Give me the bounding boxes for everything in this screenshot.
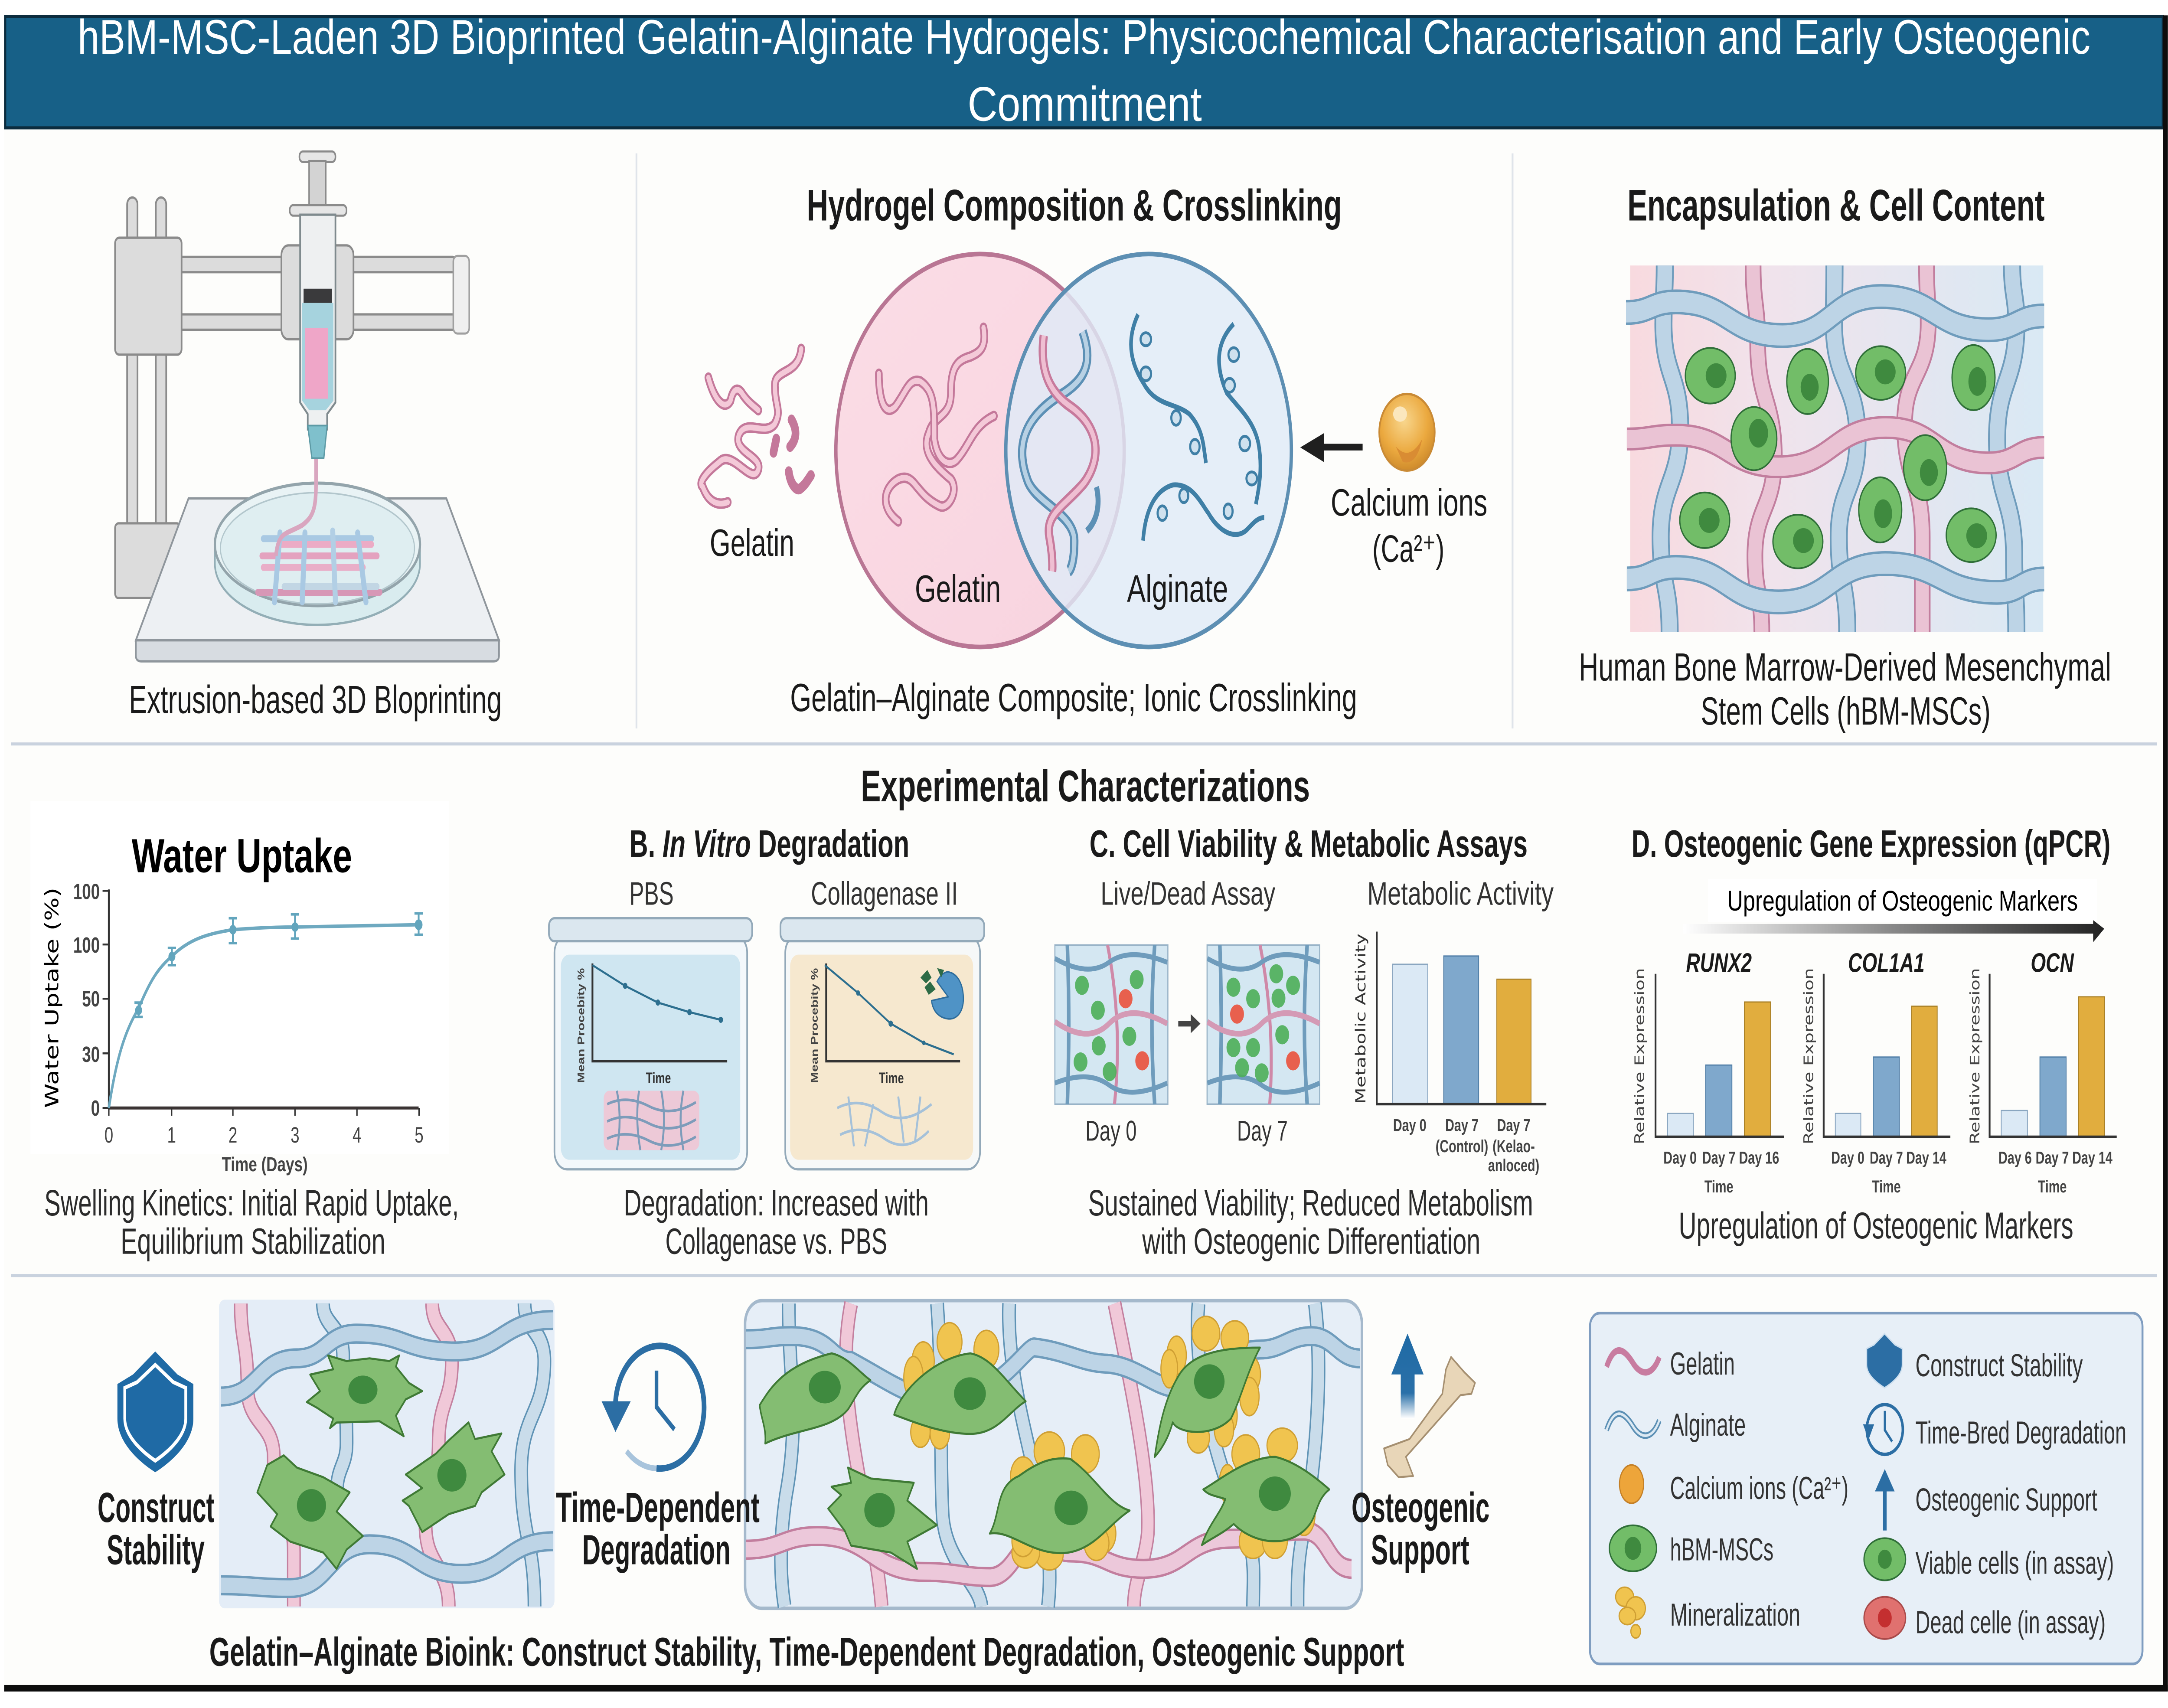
chart: water uptake curve	[41, 880, 424, 1176]
icon: gelatin chains	[879, 328, 994, 521]
image: early cell network	[219, 1300, 555, 1608]
caption: degradation line 1: Degradation: Increased with	[624, 1182, 929, 1223]
arrow: osteogenic upregulation	[1391, 1334, 1424, 1418]
chart: metabolic activity bars: anloced)	[1488, 1156, 1539, 1175]
chart: metabolic activity bars	[1353, 932, 1546, 1175]
label: day 0: Day 0	[1085, 1115, 1136, 1147]
title banner: Commitment	[967, 77, 1202, 131]
arrow: calcium to alginate	[1300, 433, 1363, 462]
icon: petri dish with printed lattice	[215, 458, 420, 625]
icon: construct stability shield	[118, 1352, 193, 1472]
label: collagenase II: Collagenase II	[811, 875, 958, 912]
chart: water uptake curve: 100	[73, 880, 100, 904]
panel: hydrogel composition	[701, 181, 1487, 720]
jar: PBS	[549, 918, 752, 1169]
venn: alginate circle	[1006, 254, 1291, 647]
caption: upregulation: Upregulation of Osteogenic Markers	[1678, 1205, 2073, 1246]
label: metabolic activity: Metabolic Activity	[1367, 875, 1554, 912]
chart: water uptake curve: 3	[291, 1123, 300, 1147]
panel: bioink outcomes	[98, 1300, 1489, 1675]
legend: dead cells: Dead celle (in assay)	[1916, 1605, 2106, 1640]
legend: viable cells: Viable cells (in assay)	[1916, 1545, 2114, 1581]
legend: osteogenic support	[1875, 1469, 2097, 1531]
heading: degradation: B. In Vitro Degradation	[629, 823, 909, 865]
jar: collagenase II: Time	[879, 1069, 904, 1087]
chart: RUNX2: RUNX2	[1686, 948, 1752, 978]
chart: water uptake curve: 0	[91, 1096, 100, 1120]
label: gelatin: Gelatin	[915, 568, 1001, 611]
chart: water uptake curve: 2	[229, 1123, 237, 1147]
heading: experimental characterizations: Experimental Characterizations	[861, 761, 1310, 811]
legend: alginate	[1606, 1408, 1746, 1443]
legend: time-bred degradation: Time-Bred Degradation	[1916, 1415, 2126, 1450]
chart: water uptake curve: 30	[82, 1042, 100, 1067]
chart: water uptake curve: 5	[415, 1123, 424, 1147]
label: osteogenic support: Support	[1371, 1526, 1469, 1573]
label: construct stability: Construct	[98, 1484, 215, 1531]
icon: calcium ion	[1379, 394, 1435, 470]
legend: time-bred degradation	[1863, 1404, 2126, 1454]
chart: RUNX2: Time	[1704, 1177, 1733, 1196]
chart: OCN: Day 14	[2072, 1149, 2112, 1168]
label: time-dependent degradation	[556, 1484, 760, 1573]
jar: collagenase II: Mean Procebity %	[809, 968, 820, 1083]
legend: gelatin	[1606, 1346, 1735, 1381]
chart: COL1A1	[1801, 948, 1950, 1196]
label: calcium formula: (Ca²⁺)	[1372, 527, 1444, 570]
chart: COL1A1: Day 7	[1870, 1149, 1903, 1168]
chart: OCN: Relative Expression	[1967, 968, 1983, 1144]
chart: water uptake curve: 0	[104, 1123, 113, 1147]
heading: viability: C. Cell Viability & Metabolic Assays	[1090, 823, 1528, 865]
chart: cell-laden network	[1626, 265, 2044, 632]
label: PBS: PBS	[629, 875, 674, 912]
jar: PBS: Time	[646, 1069, 671, 1087]
cells	[760, 1348, 1329, 1569]
caption: composite: Gelatin–Alginate Composite; Ionic Crosslinking	[790, 676, 1357, 720]
label: upregulation box	[1708, 879, 2097, 922]
icon: build plate	[136, 498, 499, 661]
label: osteogenic support: Osteogenic	[1352, 1484, 1489, 1531]
chart: water uptake curve: Time (Days)	[222, 1153, 308, 1176]
heading: encapsulation: Encapsulation & Cell Content	[1627, 181, 2044, 230]
chart: water uptake curve: 4	[353, 1123, 361, 1147]
chart: metabolic activity bars: Day 0	[1393, 1116, 1427, 1135]
legend: gelatin: Gelatin	[1670, 1346, 1735, 1381]
chart: COL1A1: COL1A1	[1848, 948, 1925, 978]
chart: RUNX2	[1632, 948, 1784, 1196]
label: alginate: Alginate	[1127, 568, 1228, 611]
chart: RUNX2: Day 0	[1663, 1149, 1697, 1168]
icon: collagenase enzyme	[921, 968, 963, 1019]
chart: OCN: Day 7	[2036, 1149, 2069, 1168]
legend: dead cells	[1864, 1597, 2106, 1640]
panel: encapsulation	[1579, 181, 2111, 733]
icon: alginate chains	[1131, 314, 1264, 541]
icon: free gelatin strands	[701, 349, 811, 503]
panel: cell viability and metabolic assays	[1055, 823, 1554, 1262]
label: gelatin strands: Gelatin	[710, 522, 794, 565]
chart: water uptake curve: Water Uptake (%)	[41, 888, 63, 1108]
icon: time-dependent clock	[601, 1346, 704, 1469]
caption: hBM-MSCs line 2: Stem Cells (hBM-MSCs)	[1701, 689, 1991, 733]
panel: legend	[1590, 1313, 2142, 1664]
chart: OCN	[1967, 948, 2117, 1196]
legend: hBM-MSCs	[1610, 1525, 1773, 1571]
chart: water uptake curve: 1	[167, 1123, 176, 1147]
caption: hBM-MSCs line 1: Human Bone Marrow-Derived Mesenchymal	[1579, 645, 2111, 689]
caption: swelling line 1: Swelling Kinetics: Initial Rapid Uptake,	[44, 1182, 459, 1223]
image: day 7 live dead mesh	[1207, 945, 1319, 1104]
chart: RUNX2: Relative Expression	[1632, 968, 1647, 1144]
label: construct stability: Stability	[107, 1526, 205, 1573]
heading: gene expression: D. Osteogenic Gene Expression (qPCR)	[1632, 823, 2110, 865]
caption: viability line 2: with Osteogenic Differentiation	[1142, 1221, 1480, 1262]
chart: metabolic activity bars: Day 7	[1445, 1116, 1479, 1135]
chart: OCN: Day 6	[1998, 1149, 2032, 1168]
legend: hBM-MSCs: hBM-MSCs	[1670, 1532, 1773, 1568]
chart: water uptake curve: 50	[82, 987, 100, 1011]
legend: construct stability	[1867, 1334, 2083, 1388]
icon: bone	[1384, 1357, 1475, 1477]
legend: viable cells	[1864, 1538, 2114, 1581]
legend: osteogenic support: Osteogenic Support	[1916, 1482, 2097, 1518]
legend: calcium ions	[1619, 1465, 1848, 1506]
caption: swelling line 2: Equilibrium Stabilization	[121, 1221, 385, 1262]
chart: COL1A1: Time	[1872, 1177, 1901, 1196]
caption: extrusion: Extrusion-based 3D Bloprinting	[129, 677, 502, 722]
caption: bioink summary: Gelatin–Alginate Bioink: Construct Stability, Time-Dependent Degradation, Osteogenic Support	[209, 1630, 1404, 1675]
icon: double helix	[1022, 332, 1098, 571]
legend: mineralization: Mineralization	[1670, 1597, 1800, 1633]
label: upregulation box: Upregulation of Osteogenic Markers	[1727, 885, 2078, 917]
chart: metabolic activity bars: (Kelao-	[1492, 1137, 1535, 1156]
jar: PBS: Mean Procebity %	[576, 968, 586, 1083]
chart: COL1A1: Day 14	[1906, 1149, 1946, 1168]
chart: metabolic activity bars: Day 7	[1497, 1116, 1530, 1135]
chart: OCN: OCN	[2031, 948, 2074, 978]
legend: mineralization	[1616, 1587, 1800, 1638]
label: day 7: Day 7	[1237, 1115, 1288, 1147]
label: time-dependent degradation: Time-Dependent	[556, 1484, 760, 1531]
caption: viability line 1: Sustained Viability; Reduced Metabolism	[1088, 1182, 1533, 1223]
chart: OCN: Time	[2038, 1177, 2067, 1196]
legend: alginate: Alginate	[1670, 1408, 1746, 1443]
legend: construct stability: Construct Stability	[1916, 1348, 2083, 1383]
chart: RUNX2: Day 16	[1739, 1149, 1779, 1168]
arrow: day 0 to day 7	[1178, 1014, 1201, 1033]
label: construct stability	[98, 1484, 215, 1573]
label: calcium ions: Calcium ions	[1331, 481, 1487, 524]
caption: degradation line 2: Collagenase vs. PBS	[666, 1221, 887, 1262]
icon: printer frame	[115, 197, 469, 598]
mineral deposits	[904, 1316, 1315, 1570]
panel: extrusion bioprinter	[115, 151, 502, 722]
panel: in vitro degradation	[549, 823, 984, 1262]
icon: syringe	[290, 151, 346, 458]
panel: osteogenic gene expression	[1632, 823, 2117, 1246]
heading: hydrogel: Hydrogel Composition & Crosslinking	[807, 181, 1342, 230]
jar: collagenase II	[780, 918, 984, 1169]
title banner	[5, 10, 2163, 131]
chart: metabolic activity bars: Metabolic Activity	[1353, 934, 1369, 1104]
chart: metabolic activity bars: (Control)	[1436, 1137, 1488, 1156]
label: osteogenic support	[1352, 1484, 1489, 1573]
chart: water uptake curve: 100	[73, 933, 100, 958]
chart: COL1A1: Day 0	[1831, 1149, 1864, 1168]
label: time-dependent degradation: Degradation	[582, 1526, 731, 1573]
chart: COL1A1: Relative Expression	[1801, 968, 1816, 1144]
label: live dead: Live/Dead Assay	[1100, 875, 1275, 912]
title banner: hBM-MSC-Laden 3D Bioprinted Gelatin-Alginate Hydrogels: Physicochemical Characterisation and Early Osteogenic	[78, 10, 2090, 64]
arrow: upregulation gradient	[1683, 920, 2104, 942]
chart: RUNX2: Day 7	[1702, 1149, 1736, 1168]
legend: calcium ions: Calcium ions (Ca²⁺)	[1670, 1471, 1848, 1506]
venn: gelatin circle	[836, 254, 1124, 647]
heading: water uptake: Water Uptake	[132, 830, 352, 883]
image: mineralized cell network	[745, 1301, 1362, 1608]
panel: water uptake	[30, 801, 459, 1262]
image: day 0 live dead mesh	[1055, 945, 1168, 1104]
